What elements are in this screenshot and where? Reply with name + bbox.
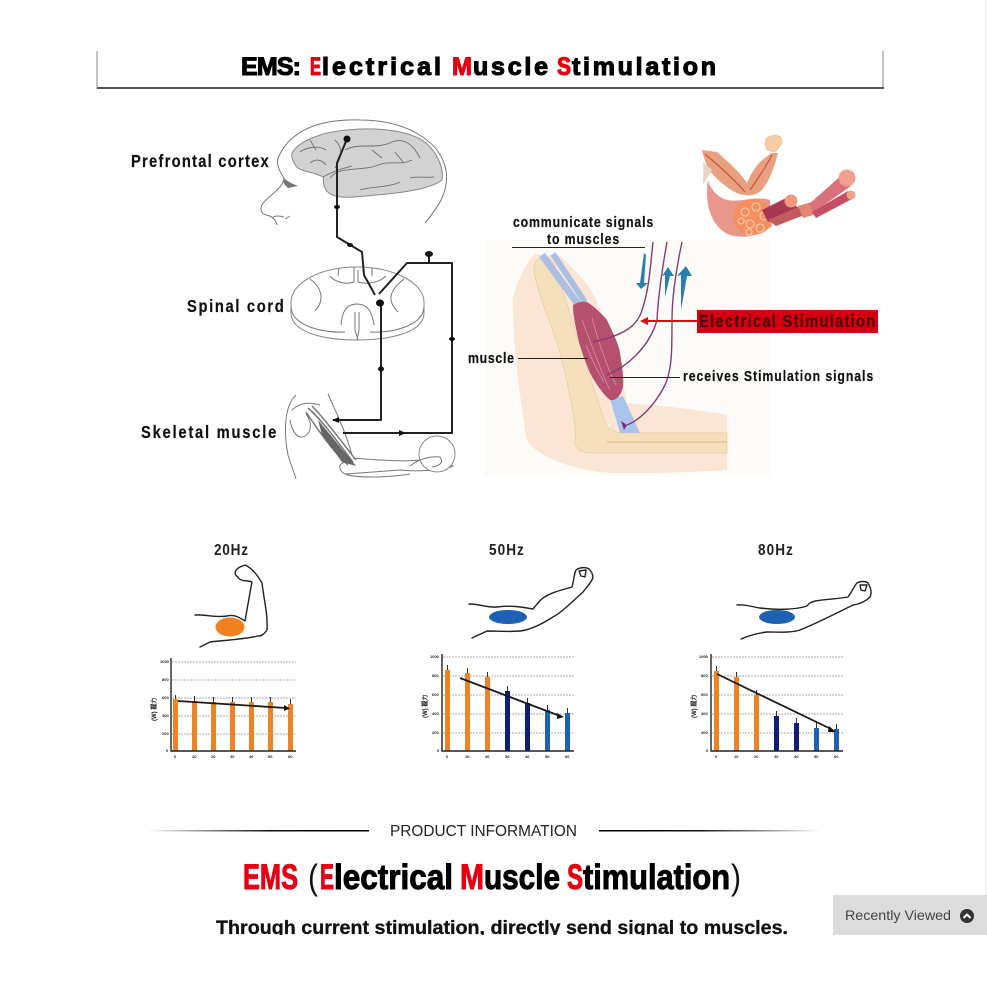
bar chart: (W) 握力 bbox=[690, 695, 698, 718]
heading: EMS full name: lectrical bbox=[334, 858, 453, 897]
bar chart: 30 bbox=[230, 754, 235, 759]
muscle bundle cross-section bbox=[707, 170, 856, 237]
panel: muscle anatomy illustration bbox=[702, 135, 856, 237]
title: uscle bbox=[473, 53, 548, 81]
bar chart: 1000 bbox=[430, 654, 440, 659]
icon: half-extended arm bbox=[469, 568, 593, 638]
bar chart: 400 bbox=[162, 713, 169, 718]
bar chart: 10 bbox=[734, 754, 739, 759]
bar chart bbox=[421, 654, 574, 759]
icon: spinal cord cross-section bbox=[291, 267, 424, 340]
bar chart: (W) 握力 bbox=[421, 695, 429, 718]
section heading: product information: PRODUCT INFORMATION bbox=[390, 823, 577, 840]
title: lectrical bbox=[322, 53, 441, 81]
button: recently viewed bbox=[833, 895, 987, 935]
bar chart: 20 bbox=[211, 754, 216, 759]
bar chart: 1000 bbox=[699, 654, 709, 659]
label: receives stimulation signals: receives Stimulation signals bbox=[683, 368, 874, 384]
red arrow bbox=[640, 317, 698, 325]
bar chart: 600 bbox=[701, 692, 708, 697]
heading: 80Hz bbox=[758, 542, 793, 559]
label: communicate signals: to muscles bbox=[547, 231, 619, 247]
button: recently viewed: Recently Viewed bbox=[845, 907, 951, 923]
label: muscle bbox=[468, 350, 588, 366]
bar chart: 30 bbox=[505, 754, 510, 759]
title: timulation bbox=[572, 53, 716, 81]
heading: EMS full name: E bbox=[320, 858, 334, 897]
bar chart: 0 bbox=[706, 748, 709, 753]
bar chart: 50 bbox=[545, 754, 550, 759]
bar chart: 0 bbox=[166, 748, 169, 753]
icon: arm with skeletal muscle bbox=[285, 394, 455, 479]
heading: 50Hz bbox=[489, 542, 524, 559]
label: communicate signals bbox=[512, 214, 654, 248]
bar chart: 800 bbox=[432, 673, 439, 678]
heading: EMS full name: EMS bbox=[243, 858, 298, 897]
title box bbox=[97, 51, 884, 89]
bar chart: 600 bbox=[162, 695, 169, 700]
icon: head outline with brain bbox=[261, 120, 447, 225]
text block: description: Through current stimulation, directly send signal to muscles. bbox=[216, 918, 788, 939]
bar chart: 20 bbox=[485, 754, 490, 759]
label: skeletal muscle: Skeletal muscle bbox=[141, 423, 276, 442]
arm bones bbox=[534, 257, 727, 453]
label: electrical stimulation: Electrical Stimulation bbox=[699, 312, 875, 331]
bar chart: 200 bbox=[432, 730, 439, 735]
title: M bbox=[452, 53, 472, 81]
bar chart: 0 bbox=[174, 754, 177, 759]
blue arrows bbox=[636, 253, 692, 310]
bar chart: 10 bbox=[465, 754, 470, 759]
tendons bbox=[542, 254, 640, 433]
bar chart: 400 bbox=[701, 711, 708, 716]
panel: arm stimulation diagram bbox=[468, 214, 878, 476]
label: prefrontal cortex: Prefrontal cortex bbox=[131, 152, 270, 171]
heading: EMS full name: ( bbox=[308, 858, 318, 897]
bar chart: 0 bbox=[715, 754, 718, 759]
bar chart: 40 bbox=[525, 754, 530, 759]
bar chart: 50 bbox=[814, 754, 819, 759]
bar chart: 60 bbox=[565, 754, 570, 759]
icon: flexed arm bbox=[195, 565, 267, 647]
icon: chevron up bbox=[960, 909, 974, 923]
heading: EMS full name: M bbox=[460, 858, 484, 897]
bar chart: 40 bbox=[249, 754, 254, 759]
neural pathways bbox=[332, 136, 455, 436]
title: EMS: bbox=[241, 53, 301, 81]
bar chart: 0 bbox=[446, 754, 449, 759]
heading: EMS full name: timulation bbox=[583, 858, 730, 897]
title: E bbox=[310, 53, 321, 81]
label: muscle: muscle bbox=[468, 350, 514, 366]
bar chart: 60 bbox=[288, 754, 293, 759]
bar chart: 40 bbox=[794, 754, 799, 759]
bar chart: 400 bbox=[432, 711, 439, 716]
title bbox=[241, 53, 716, 81]
bar chart: (W) 握力 bbox=[150, 698, 158, 721]
bar chart: 1000 bbox=[160, 659, 170, 664]
heading: EMS full name: S bbox=[567, 858, 583, 897]
heading: EMS full name: ) bbox=[731, 858, 741, 897]
bar chart: 0 bbox=[437, 748, 440, 753]
arm skin bbox=[513, 254, 727, 473]
label: communicate signals: communicate signals bbox=[513, 214, 654, 230]
muscle fibres bbox=[582, 318, 616, 390]
bar chart bbox=[690, 654, 843, 759]
title: S bbox=[557, 53, 571, 81]
bar chart: 800 bbox=[162, 677, 169, 682]
bar chart: 200 bbox=[701, 730, 708, 735]
label: spinal cord: Spinal cord bbox=[187, 297, 284, 316]
bar chart: 10 bbox=[192, 754, 197, 759]
bar chart: 20 bbox=[754, 754, 759, 759]
bar chart: 60 bbox=[834, 754, 839, 759]
nerves bbox=[593, 242, 682, 430]
bar chart: 30 bbox=[774, 754, 779, 759]
panel: 20Hz bbox=[150, 542, 296, 759]
bar chart bbox=[150, 658, 296, 759]
heading: EMS full name: uscle bbox=[484, 858, 560, 897]
muscle belly bbox=[573, 302, 623, 400]
bar chart: 200 bbox=[162, 731, 169, 736]
heading: EMS full name bbox=[243, 858, 741, 897]
panel: 50Hz bbox=[421, 542, 593, 759]
bar chart: 50 bbox=[268, 754, 273, 759]
icon: extended arm bbox=[737, 582, 871, 639]
bar chart: 600 bbox=[432, 692, 439, 697]
forearm muscle diagram bbox=[702, 135, 782, 195]
bar chart: 800 bbox=[701, 673, 708, 678]
heading: 20Hz bbox=[214, 542, 248, 559]
panel: 80Hz bbox=[690, 542, 871, 759]
panel: neural pathway diagram bbox=[131, 120, 455, 479]
